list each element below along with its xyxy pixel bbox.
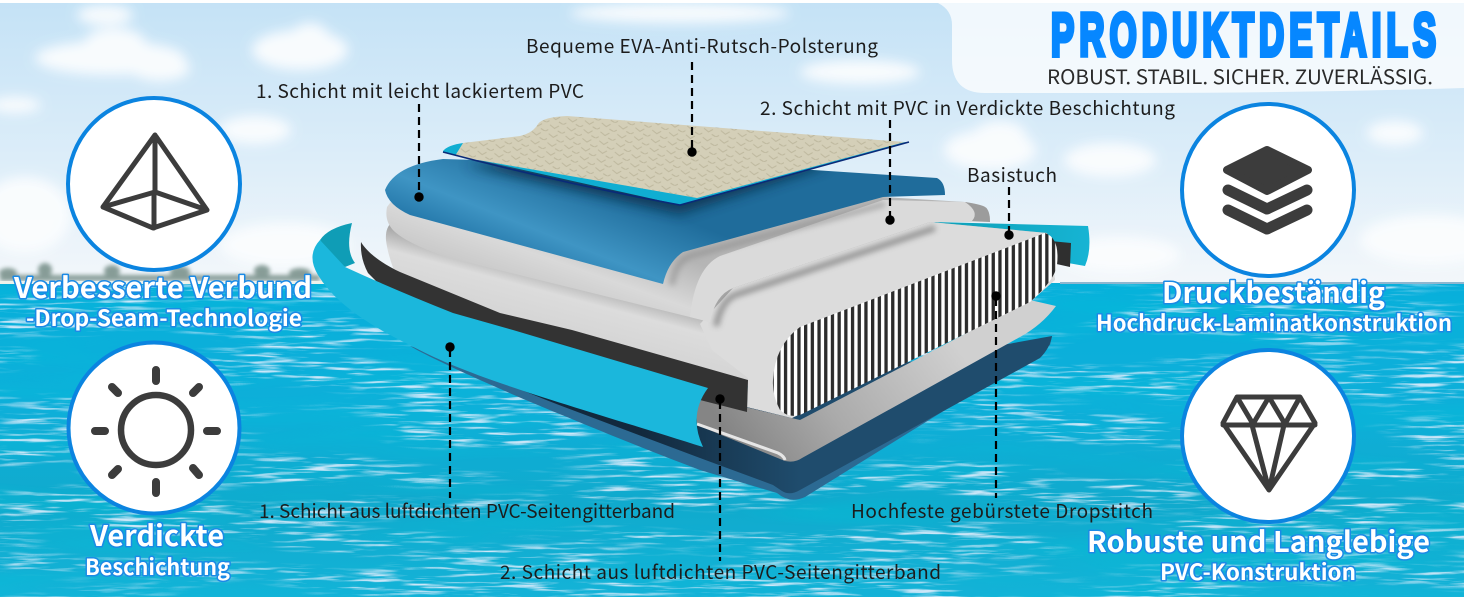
callout: layer 1 PVC: 1. Schicht mit leicht lackiertem PVC — [256, 77, 584, 104]
layer: teal back end — [933, 222, 1089, 266]
callout: layer 2 PVC — [760, 94, 1175, 225]
callout: side band 2: 2. Schicht aus luftdichten PVC-Seitengitterband — [500, 558, 941, 585]
layer: bottom hull — [410, 336, 1052, 500]
shadow: under upper grey sheet — [716, 228, 935, 326]
background: sea — [0, 282, 1464, 600]
icon: sun — [68, 342, 240, 514]
heading: pressure: Druckbeständig — [1162, 271, 1385, 312]
background: sky — [0, 0, 1464, 285]
shadow: beneath deck pad — [465, 150, 830, 214]
subtitle: ROBUST. STABIL. SICHER. ZUVERLÄSSIG. — [1047, 61, 1433, 90]
background: treeline — [0, 263, 340, 284]
product: exploded board layers — [312, 116, 1089, 500]
icon: pyramid — [68, 98, 240, 270]
title: PRODUKTDETAILS — [1051, 3, 1436, 69]
heading: composite: Verbesserte Verbund — [13, 266, 312, 307]
callout: EVA pad — [526, 32, 878, 157]
header panel — [938, 3, 1464, 93]
icon: layers — [1182, 104, 1354, 276]
heading: coating: Verdickte — [89, 514, 224, 555]
shadow: under blue sheet — [672, 204, 885, 285]
callout: dropstitch: Hochfeste gebürstete Dropstitch — [851, 497, 1153, 524]
layer: EVA deck pad — [443, 116, 909, 205]
icon: diamond — [1182, 350, 1354, 522]
layer: lower grey sheet — [695, 300, 1056, 462]
layer: blue top sheet — [385, 159, 945, 284]
layer: main grey body — [386, 200, 1055, 418]
callout: base fabric — [967, 161, 1057, 240]
callout: dropstitch — [851, 291, 1153, 524]
callout: layer 2 PVC: 2. Schicht mit PVC in Verdickte Beschichtung — [760, 94, 1175, 121]
callout: side band 2 — [500, 394, 941, 585]
subheading: laminate: Hochdruck-Laminatkonstruktion — [1096, 306, 1452, 338]
layer: body right surface — [700, 222, 1055, 418]
layer: black back end — [1050, 241, 1071, 267]
subheading: drop seam: -Drop-Seam-Technologie — [26, 301, 302, 333]
layer: stitched dropstitch side — [773, 233, 1058, 416]
layer: cyan side strip — [312, 223, 708, 447]
layer: upper grey sheet — [386, 190, 990, 322]
callout: EVA pad: Bequeme EVA-Anti-Rutsch-Polsterung — [526, 32, 878, 59]
callout: side band 1 — [259, 342, 675, 524]
callout: layer 1 PVC — [256, 77, 584, 202]
callout: base fabric: Basistuch — [967, 161, 1057, 188]
callout: side band 1: 1. Schicht aus luftdichten PVC-Seitengitterband — [259, 497, 675, 524]
heading: durable: Robuste und Langlebige — [1087, 520, 1430, 561]
layer: black strip — [361, 242, 748, 412]
subheading: coating: Beschichtung — [85, 550, 230, 582]
subheading: PVC: PVC-Konstruktion — [1160, 555, 1356, 587]
